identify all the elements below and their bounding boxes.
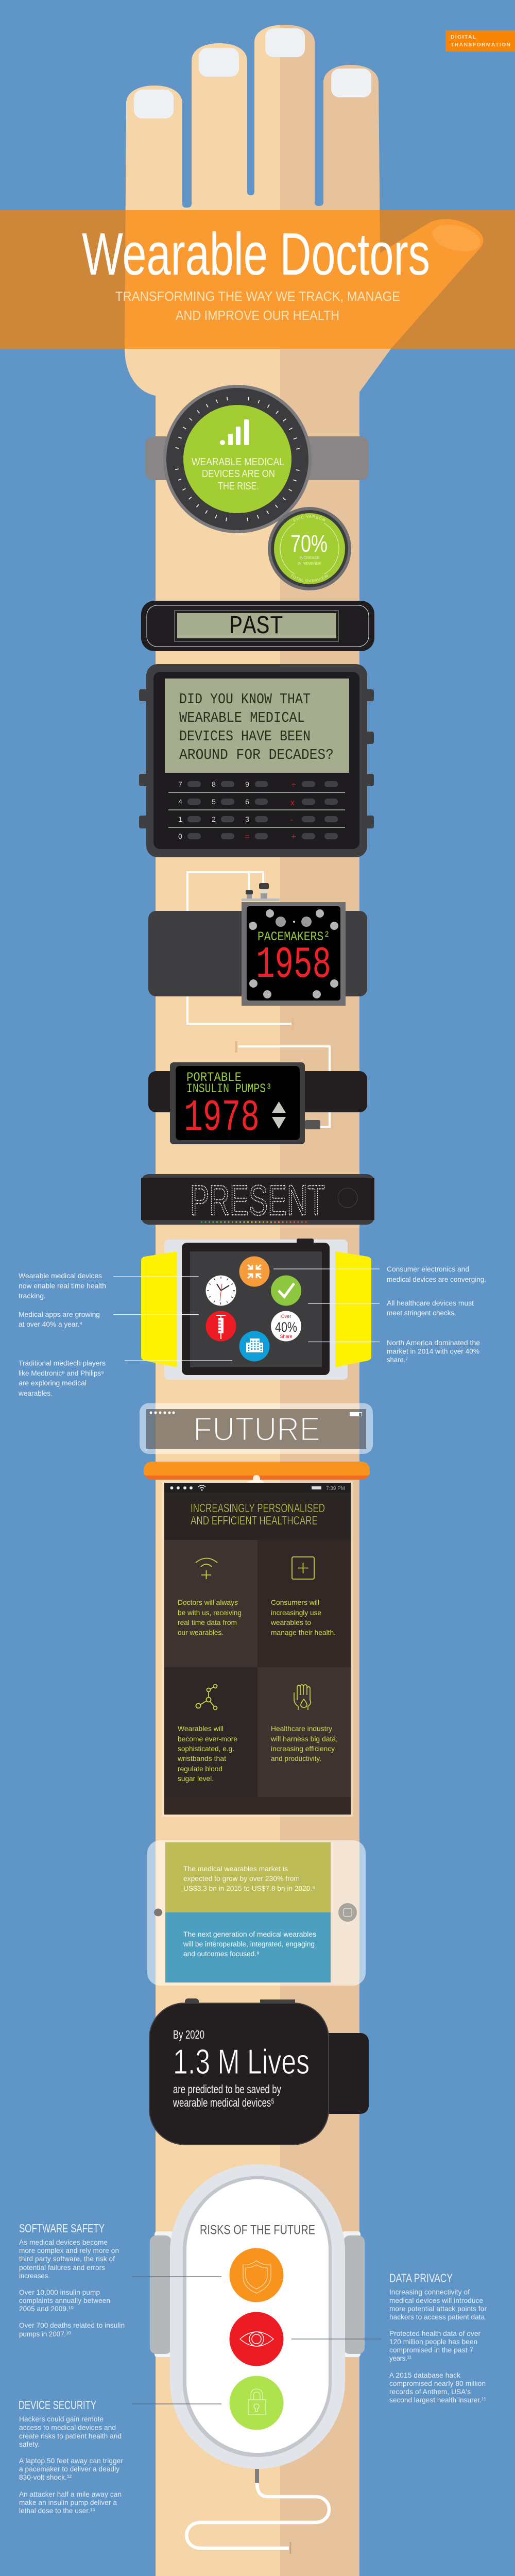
icon: hospital building [239,1331,270,1361]
watch: 1.3 M lives: wearable medical devices⁵ [173,2096,274,2109]
insulin pump watch: 1978 [184,1093,260,1143]
title band [0,210,515,349]
heading: personalised [191,1501,325,1527]
insulin pump watch [148,1041,367,1144]
icon: plus box [292,1557,314,1579]
lcd message: AROUND FOR DECADES? [179,747,334,764]
text: device security: 830-volt shock.¹² [19,2473,72,2481]
text: traditional medtech: Traditional medtech players [19,1359,106,1367]
text: device security: A laptop 50 feet away can trigger [19,2457,123,2465]
icon: syringe [206,1311,236,1342]
lcd message: DEVICES HAVE BEEN [179,728,311,745]
keypad: 6 [245,798,249,806]
tube [238,1046,330,1127]
heading: past: PAST [229,612,283,641]
watch: 70% increase in revenue [268,507,351,590]
heading: future [140,1403,373,1454]
text: software safety: pumps in 2007.¹⁰ [19,2330,72,2338]
cell: wearables: Wearables will [178,1724,224,1733]
text: device security: access to medical devices and [19,2424,116,2432]
screws [249,909,338,998]
insulin pump watch: INSULIN PUMPS³ [186,1081,272,1096]
smartwatch: present [141,1239,371,1380]
icon: hand with drop [294,1685,311,1710]
orange clasp [144,1462,370,1483]
text: north america: share.⁷ [387,1355,408,1364]
text: device security: An attacker half a mile away can [19,2490,122,2498]
keypad: 7 [178,780,182,788]
text: data privacy: A 2015 database hack [389,2371,460,2379]
lcd message [179,691,334,764]
keypad: x [290,799,295,807]
text: software safety: third party software, the risk of [19,2255,115,2263]
watch: 70% increase in revenue: TOTAL OVERVIEW [291,574,328,582]
heading: personalised: INCREASINGLY PERSONALISED [191,1501,325,1515]
status bar [164,1483,351,1493]
cell: wearables: sophisticated, e.g. [178,1744,234,1753]
keypad: = [245,833,250,841]
text: north america: North America dominated the [387,1338,480,1347]
text: on the rise: WEARABLE MEDICAL [192,456,284,468]
text: on the rise [192,456,284,492]
text: on the rise: DEVICES ARE ON [202,468,275,480]
keypad: 5 [212,798,216,806]
watch: risks of the future: RISKS OF THE FUTURE [200,2223,315,2237]
watch: 70% increase in revenue: INCREASE [300,555,319,560]
side clasps [150,2231,365,2357]
watch: 70% increase in revenue: 70% [290,530,328,557]
icon: signal bars [220,419,249,445]
panel: market growth: US$3.3 bn in 2015 to US$7.8 bn in 2020.⁸ [183,1885,315,1892]
pacemaker watch: 1958 [256,940,331,990]
text: medical apps: Medical apps are growing [19,1310,100,1318]
side buttons [139,689,374,828]
cell: consumers [258,1540,351,1667]
cell: doctors: Doctors will always [178,1598,238,1606]
cell: healthcare industry: increasing efficiency [271,1744,335,1753]
text: converging: medical devices are converging. [387,1275,486,1283]
text: stringent checks: All healthcare devices must [387,1299,474,1307]
cell: healthcare industry: Healthcare industry [271,1724,332,1733]
cell: consumers: wearables to [270,1618,311,1626]
cell: wearables [164,1667,258,1797]
panel: next generation: will be interoperable, integrated, engaging [183,1940,315,1948]
icon: lock [230,2376,283,2430]
subtitle [115,289,400,323]
lcd message: WEARABLE MEDICAL [179,709,305,726]
text: software safety [19,2222,125,2338]
cell: wearables: wristbands that [177,1754,226,1762]
cell: doctors: be with us, receiving [178,1608,242,1617]
text: data privacy: compromised in the past 7 [389,2346,473,2354]
arrows [272,1101,286,1129]
watch: risks of the future [150,2164,365,2554]
status bar: 7:39 PM [326,1485,345,1492]
keypad [168,780,345,841]
keypad: - [290,816,293,824]
text: stringent checks [387,1299,474,1317]
text: data privacy: Protected health data of over [389,2330,480,2337]
pacemaker watch: PACEMAKERS² [258,929,330,944]
cell: healthcare industry: will harness big data, [270,1735,338,1743]
keypad: + [291,833,296,841]
phone: market growth [147,1840,366,1986]
personalised healthcare tablet [144,1462,370,1817]
text: device security: Hackers could gain remote [19,2415,104,2423]
panel: market growth [165,1842,331,1912]
text: data privacy: years.¹¹ [389,2354,411,2362]
yellow straps [141,1251,371,1367]
text: north america: market in 2014 with over 40% [387,1347,479,1355]
cell: consumers: manage their health. [271,1628,336,1636]
heading: present: PRESENT [190,1176,325,1224]
keypad: ÷ [291,781,296,789]
cell: healthcare industry [258,1667,351,1797]
insulin pump watch: PORTABLE [186,1070,242,1085]
text: data privacy: DATA PRIVACY [389,2271,453,2284]
text: software safety: As medical devices become [19,2239,108,2246]
text: data privacy: records of Anthem, USA's [389,2388,471,2396]
icon: forty percent share: 40% [275,1319,297,1335]
text: real time health tracking [19,1272,106,1300]
text: data privacy: Increasing connectivity of [389,2289,470,2296]
hand and arm [125,25,391,2576]
text: device security: DEVICE SECURITY [19,2398,96,2412]
text: medical apps: at over 40% a year.⁴ [19,1320,82,1328]
text: software safety: more complex and rely more on [19,2247,119,2255]
text: device security: safety. [19,2441,40,2448]
text: software safety: SOFTWARE SAFETY [19,2222,105,2235]
callout lines: present [113,1269,380,1361]
icon: wifi plus [196,1558,217,1579]
wire [187,872,291,1024]
text: device security: a pacemaker to deliver a deadly [19,2465,119,2473]
text: traditional medtech: are exploring medical [19,1379,87,1387]
text: data privacy: hackers to access patient data. [389,2313,487,2321]
cord [186,2469,329,2554]
panel: market growth: The medical wearables market is [183,1865,288,1873]
icon: network [196,1685,217,1709]
cell: wearables: sugar level. [178,1774,214,1783]
text: data privacy: second largest health insurer.¹¹ [389,2396,486,2404]
text: traditional medtech [18,1359,106,1397]
icon: eye [230,2312,283,2366]
watch: 1.3 M lives: are predicted to be saved by [173,2082,281,2096]
text: data privacy: 120 million people has been [389,2338,477,2346]
text: real time health tracking: tracking. [19,1292,46,1300]
text: medical apps [19,1310,100,1328]
cell: wearables: regulate blood [178,1765,222,1773]
pacemaker watch [148,872,367,1030]
keypad: 8 [212,780,216,788]
icon: forty percent share: Share [280,1334,293,1339]
cell: doctors: real time data from [178,1618,237,1626]
heading: personalised: AND EFFICIENT HEALTHCARE [191,1514,318,1527]
heading: past [141,601,374,651]
panel: next generation [165,1912,331,1982]
cell: consumers: increasingly use [271,1608,321,1617]
icon: forty percent share: Over [281,1314,291,1319]
tag: digital transformation [445,30,515,52]
text: data privacy [389,2271,487,2404]
watch: 1.3 M lives: By 2020 [173,2028,204,2041]
text: data privacy: more potential attack points for [389,2305,487,2313]
watch: 70% increase in revenue: IN REVENUE [298,561,321,566]
lcd message: DID YOU KNOW THAT [179,691,311,708]
tag: digital transformation: TRANSFORMATION [451,42,510,48]
cell: doctors: our wearables. [178,1628,224,1636]
heading: future: FUTURE [193,1410,320,1448]
text: device security [19,2398,123,2515]
text: software safety: potential failures and errors [19,2264,105,2272]
text: software safety: Over 10,000 insulin pump [19,2289,100,2296]
text: device security: lethal dose to the user.¹³ [19,2507,95,2515]
keypad: 3 [245,815,249,823]
text: real time health tracking: Wearable medical devices [19,1272,102,1280]
text: software safety: Over 700 deaths related to insulin [19,2321,125,2329]
keypad: 4 [178,798,182,806]
text: stringent checks: meet stringent checks. [387,1309,456,1317]
cell: doctors [164,1540,258,1667]
tag: digital transformation: DIGITAL [451,34,476,40]
icon: forty percent share [271,1311,301,1342]
panel: next generation: The next generation of medical wearables [183,1930,316,1938]
text: converging: Consumer electronics and [387,1265,469,1273]
watch: 70% increase in revenue: EVIC VARSOM [293,515,325,522]
text: software safety: complaints annually between [19,2297,110,2304]
text: traditional medtech: like Medtronic⁶ and Philips⁵ [19,1369,104,1377]
text: device security: make an insulin pump deliver a [19,2499,117,2506]
icon: clock [206,1276,236,1306]
text: device security: create risks to patient health and [19,2432,122,2440]
text: data privacy: medical devices will introduce [389,2297,483,2304]
panel: market growth: expected to grow by over 230% from [183,1875,300,1883]
icon: shield [230,2248,283,2302]
text: data privacy: compromised nearly 80 million [389,2380,486,2387]
panel: next generation: and outcomes focused.⁹ [183,1950,260,1958]
connectors [242,883,280,901]
cell: wearables: become ever-more [178,1735,237,1743]
text: real time health tracking: now enable real time health [19,1282,106,1290]
keypad: 1 [178,815,182,823]
subtitle: TRANSFORMING THE WAY WE TRACK, MANAGE [115,289,400,304]
watch: 1.3 M lives [149,1998,369,2144]
callout lines: risks [132,2277,381,2404]
watch: wearable medical devices on the rise [145,385,369,533]
watch: 1.3 M lives: 1.3 M Lives [173,2042,310,2081]
keypad: 2 [212,815,216,823]
icon: converging arrows [239,1256,270,1287]
text: software safety: 2005 and 2009.¹⁰ [19,2305,74,2313]
subtitle: AND IMPROVE OUR HEALTH [176,308,339,323]
text: converging [387,1265,486,1283]
cell: healthcare industry: and productivity. [271,1754,321,1762]
keypad: 0 [178,832,182,840]
icon: check [271,1276,301,1306]
text: north america [387,1338,480,1364]
cell: consumers: Consumers will [271,1598,319,1606]
text: software safety: increases. [19,2272,50,2280]
text: traditional medtech: wearables. [18,1389,53,1397]
text: on the rise: THE RISE. [218,481,259,492]
keypad: 9 [245,780,249,788]
calculator watch [139,664,374,857]
